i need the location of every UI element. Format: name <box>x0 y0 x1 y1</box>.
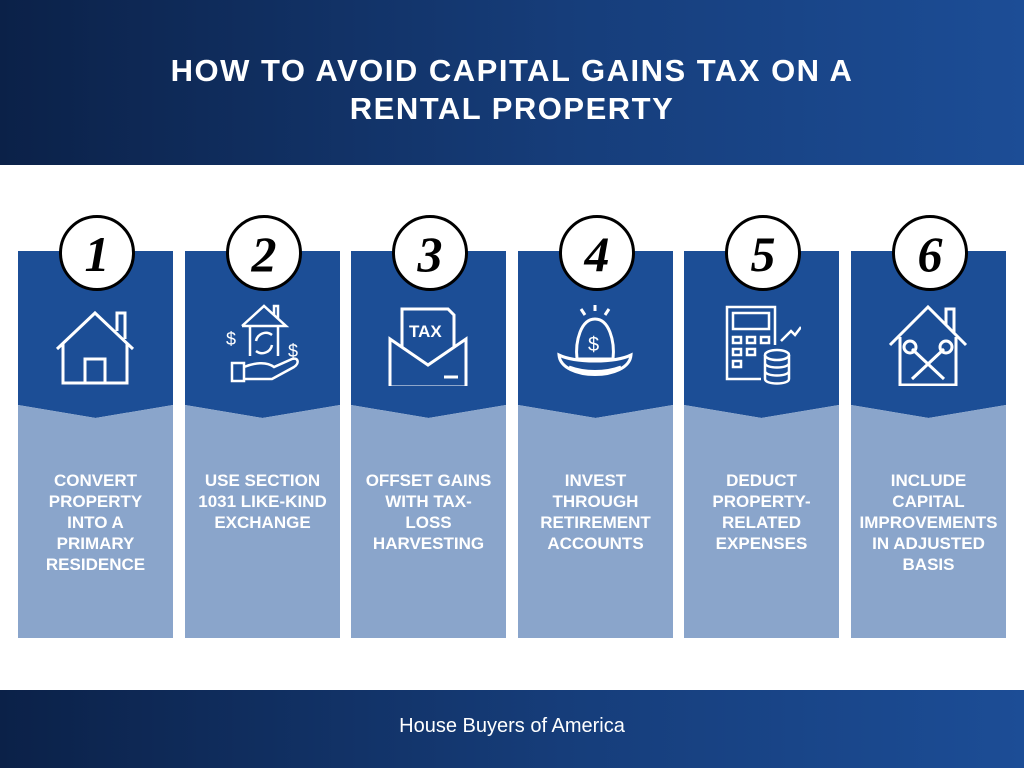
panel: step 2 <box>185 215 340 638</box>
number 5: 5 <box>750 226 776 282</box>
icon: house tools <box>889 305 967 386</box>
text: EXCHANGE <box>214 513 311 532</box>
number 4: 4 <box>584 226 610 282</box>
text: CAPITAL <box>892 492 965 511</box>
icon: nest egg <box>557 305 633 376</box>
text: USE SECTION <box>205 471 320 490</box>
text: DEDUCT <box>726 471 797 490</box>
text <box>712 471 811 553</box>
number 2 <box>226 215 302 291</box>
title: RENTAL PROPERTY <box>350 91 674 126</box>
number 3 <box>392 215 468 291</box>
text: RETIREMENT <box>540 513 651 532</box>
number 6: 6 <box>918 226 942 282</box>
text: ACCOUNTS <box>547 534 644 553</box>
text: IMPROVEMENTS <box>860 513 997 532</box>
text: HARVESTING <box>373 534 484 553</box>
text: OFFSET GAINS <box>366 471 491 490</box>
number 6 <box>892 215 968 291</box>
text: PRIMARY <box>57 534 134 553</box>
icon: tax envelope: TAX <box>409 322 442 341</box>
text: EXPENSES <box>716 534 807 553</box>
text: CONVERT <box>54 471 137 490</box>
text: INCLUDE <box>891 471 966 490</box>
number 4 <box>559 215 635 291</box>
text: RESIDENCE <box>46 555 145 574</box>
text <box>860 471 997 574</box>
panel: step 4 <box>518 215 673 638</box>
number 1 <box>59 215 135 291</box>
number 1: 1 <box>84 226 110 282</box>
number 3: 3 <box>418 226 442 282</box>
text: LOSS <box>405 513 452 532</box>
panel: step 3 <box>351 215 506 638</box>
text: WITH TAX- <box>385 492 472 511</box>
text: 1031 LIKE-KIND <box>198 492 327 511</box>
text: RELATED <box>722 513 801 532</box>
text: INTO A <box>67 513 124 532</box>
footer: House Buyers of America <box>399 715 625 737</box>
text <box>198 471 327 532</box>
panel: step 5 <box>684 215 839 638</box>
icon: nest egg: $ <box>588 334 599 356</box>
icon: exchange hand: $ <box>288 341 298 361</box>
text <box>366 471 491 553</box>
title <box>171 53 853 126</box>
text <box>540 471 651 553</box>
text: PROPERTY <box>49 492 142 511</box>
panel: step 1 <box>18 215 173 638</box>
number 2: 2 <box>252 226 276 282</box>
icon: house <box>56 311 134 384</box>
icon: tax envelope <box>388 308 468 386</box>
number 5 <box>725 215 801 291</box>
icon: exchange hand <box>226 304 299 382</box>
text: BASIS <box>903 555 954 574</box>
panel: step 6 <box>851 215 1006 638</box>
text: INVEST <box>565 471 626 490</box>
footer <box>0 690 1024 768</box>
icon: exchange hand: $ <box>226 329 236 349</box>
text <box>46 471 145 574</box>
title: HOW TO AVOID CAPITAL GAINS TAX ON A <box>171 53 853 88</box>
text: PROPERTY- <box>712 492 811 511</box>
header <box>0 0 1024 165</box>
text: IN ADJUSTED <box>872 534 985 553</box>
text: THROUGH <box>553 492 638 511</box>
icon: calculator coins <box>726 306 801 385</box>
